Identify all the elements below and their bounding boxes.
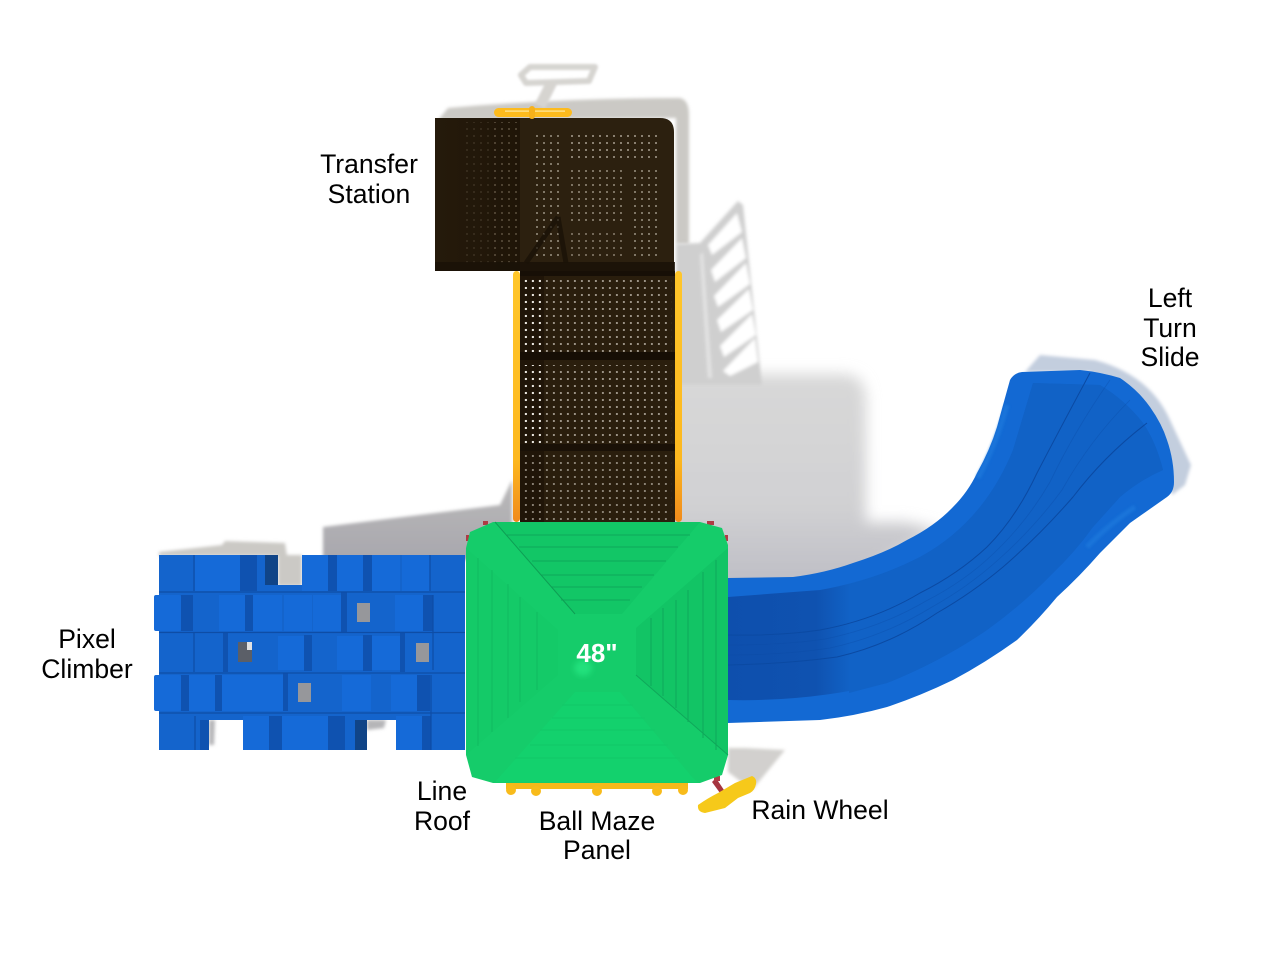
slide inner bed	[728, 383, 1163, 700]
ramp dots	[524, 277, 672, 521]
label: left turn slide: Left	[1148, 283, 1192, 313]
shadow: ladder	[676, 201, 762, 385]
label: pixel climber: Pixel	[58, 624, 116, 654]
label: ball maze panel: Ball Maze	[539, 806, 655, 836]
label: left turn slide: Slide	[1140, 342, 1200, 372]
label: rain wheel: Rain Wheel	[751, 795, 889, 825]
transfer bar yellow	[494, 106, 572, 119]
roof bottom panel	[495, 692, 697, 782]
transfer station deck	[435, 118, 675, 271]
slide highlights	[978, 405, 1007, 478]
label: left turn slide: Turn	[1143, 313, 1197, 343]
climber holes	[238, 603, 429, 702]
label: line roof: Line	[417, 776, 467, 806]
ramp deck with rails	[513, 271, 682, 522]
deck height: 48"	[576, 638, 618, 668]
label: pixel climber: Climber	[41, 654, 133, 684]
rain wheel	[698, 776, 756, 813]
cast shadows	[159, 67, 1191, 790]
label: ball maze panel: Panel	[563, 835, 631, 865]
slide grooves	[728, 373, 1147, 665]
roof centre highlight	[574, 660, 592, 676]
climber raised blocks	[154, 555, 430, 750]
shadow: wheel	[521, 67, 595, 106]
roof left panel	[466, 548, 558, 755]
label: transfer station: Station	[328, 179, 410, 209]
ball maze panel	[506, 782, 688, 796]
climber shade seams	[181, 555, 433, 750]
roof top panel	[495, 522, 700, 614]
label: line roof: Roof	[414, 806, 471, 836]
line roof	[466, 521, 728, 783]
left turn slide	[728, 370, 1174, 723]
roof right panel	[636, 548, 728, 755]
pixel climber	[154, 555, 465, 750]
climber row seams	[159, 555, 465, 750]
label: transfer station: Transfer	[320, 149, 418, 179]
